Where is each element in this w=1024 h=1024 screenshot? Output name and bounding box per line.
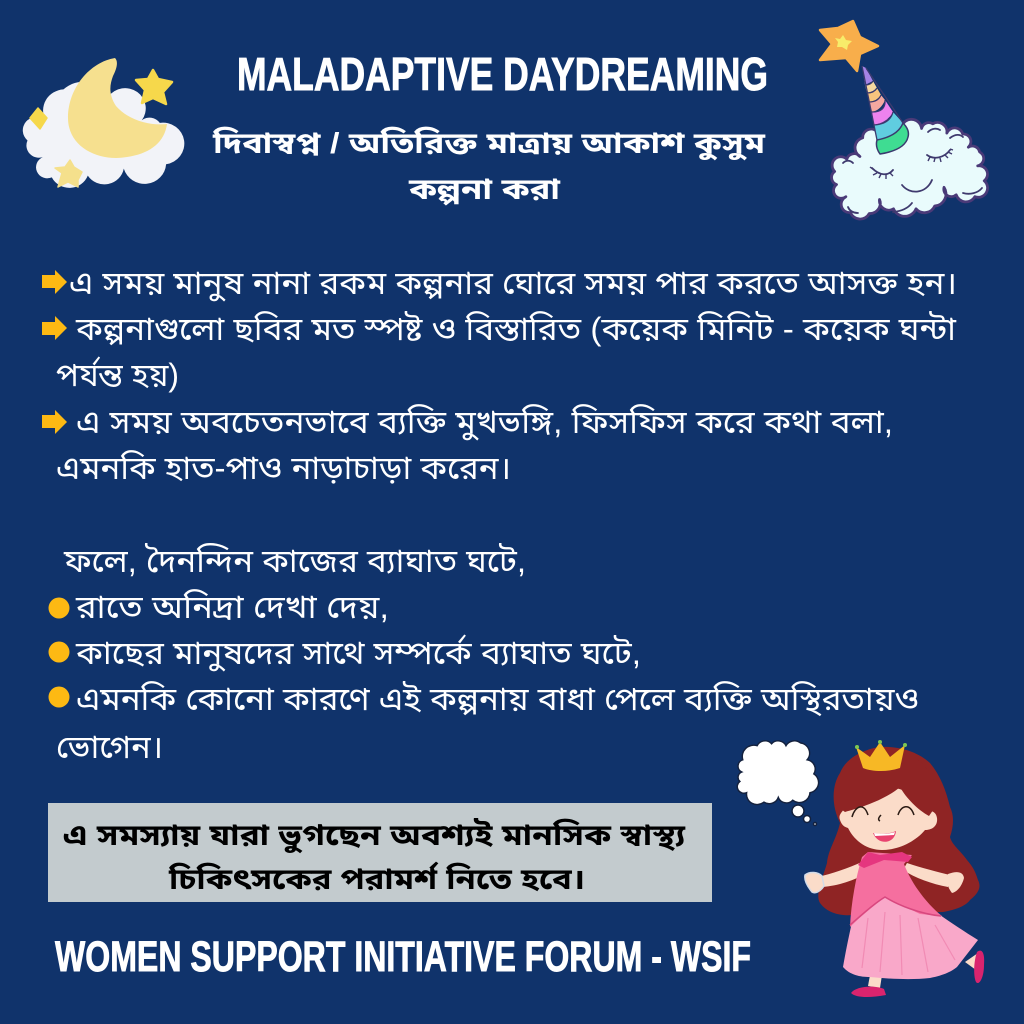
text block: symptoms: এমনকি হাত-পাও নাড়াচাড়া করেন। <box>56 450 511 486</box>
text block: consequences: ফলে, দৈনন্দিন কাজের ব্যাঘাত ঘটে, <box>63 543 526 579</box>
eyelashes <box>870 149 953 179</box>
left arm <box>817 862 867 887</box>
hair <box>818 747 979 915</box>
callout: seek professional advice: এ সমস্যায় যারা ভুগছেন অবশ্যই মানসিক স্বাস্থ্য <box>63 819 686 853</box>
subtitle: কল্পনা করা <box>408 174 561 206</box>
shoes <box>851 987 886 997</box>
text block: symptoms: কল্পনাগুলো ছবির মত স্পষ্ট ও বিস্তারিত (কয়েক মিনিট - কয়েক ঘন্টা <box>75 311 957 347</box>
text block: symptoms: এ সময় অবচেতনভাবে ব্যক্তি মুখভঙ্গি, ফিসফিস করে কথা বলা, <box>76 404 893 441</box>
skirt <box>843 897 978 979</box>
text block: symptoms <box>42 265 957 486</box>
eyes and mouth <box>852 807 914 821</box>
star <box>820 21 878 71</box>
horn <box>862 66 873 85</box>
footer: organisation name: WOMEN SUPPORT INITIATIVE FORUM - WSIF <box>55 933 751 981</box>
face <box>839 788 937 850</box>
text block: consequences: ভোগেন। <box>56 729 163 765</box>
icon: unicorn horn on sleeping cloud <box>820 21 988 219</box>
icon: bullet dot 2 <box>48 642 70 662</box>
text block: symptoms: এ সময় মানুষ নানা রকম কল্পনার ঘোরে সময় পার করতে আসক্ত হন। <box>69 265 957 302</box>
collar <box>858 852 912 868</box>
callout: seek professional advice: চিকিৎসকের পরামর্শ নিতে হবে। <box>168 862 585 896</box>
subtitle: দিবাস্বপ্ন / অতিরিক্ত মাত্রায় আকাশ কুসুম <box>212 127 766 161</box>
icon: thought bubble <box>737 741 819 826</box>
fringe <box>834 747 940 816</box>
icon: princess character <box>805 740 984 997</box>
text block: symptoms: পর্যন্ত হয়) <box>56 356 179 393</box>
text block: consequences <box>48 543 919 765</box>
text block: consequences: কাছের মানুষদের সাথে সম্পর্কে ব্যাঘাত ঘটে, <box>75 634 641 672</box>
icon: moon on cloud with stars <box>23 58 184 188</box>
legs <box>868 975 882 988</box>
icon: bullet dot 1 <box>48 598 70 618</box>
text block: consequences: এমনকি কোনো কারণে এই কল্পনায় বাধা পেলে ব্যক্তি অস্থিরতায়ও <box>76 681 919 717</box>
bodice <box>850 852 942 927</box>
subtitle <box>212 127 766 206</box>
icon: arrow bullet 2 <box>42 316 67 340</box>
cloud <box>832 119 988 219</box>
text block: consequences: রাতে অনিদ্রা দেখা দেয়, <box>75 589 389 625</box>
icon: arrow bullet 1 <box>42 270 67 294</box>
callout: seek professional advice <box>48 803 712 902</box>
icon: bullet dot 3 <box>48 686 70 708</box>
title: MALADAPTIVE DAYDREAMING <box>237 48 768 100</box>
crown <box>856 742 905 771</box>
right arm <box>903 863 950 887</box>
icon: arrow bullet 3 <box>42 410 67 434</box>
